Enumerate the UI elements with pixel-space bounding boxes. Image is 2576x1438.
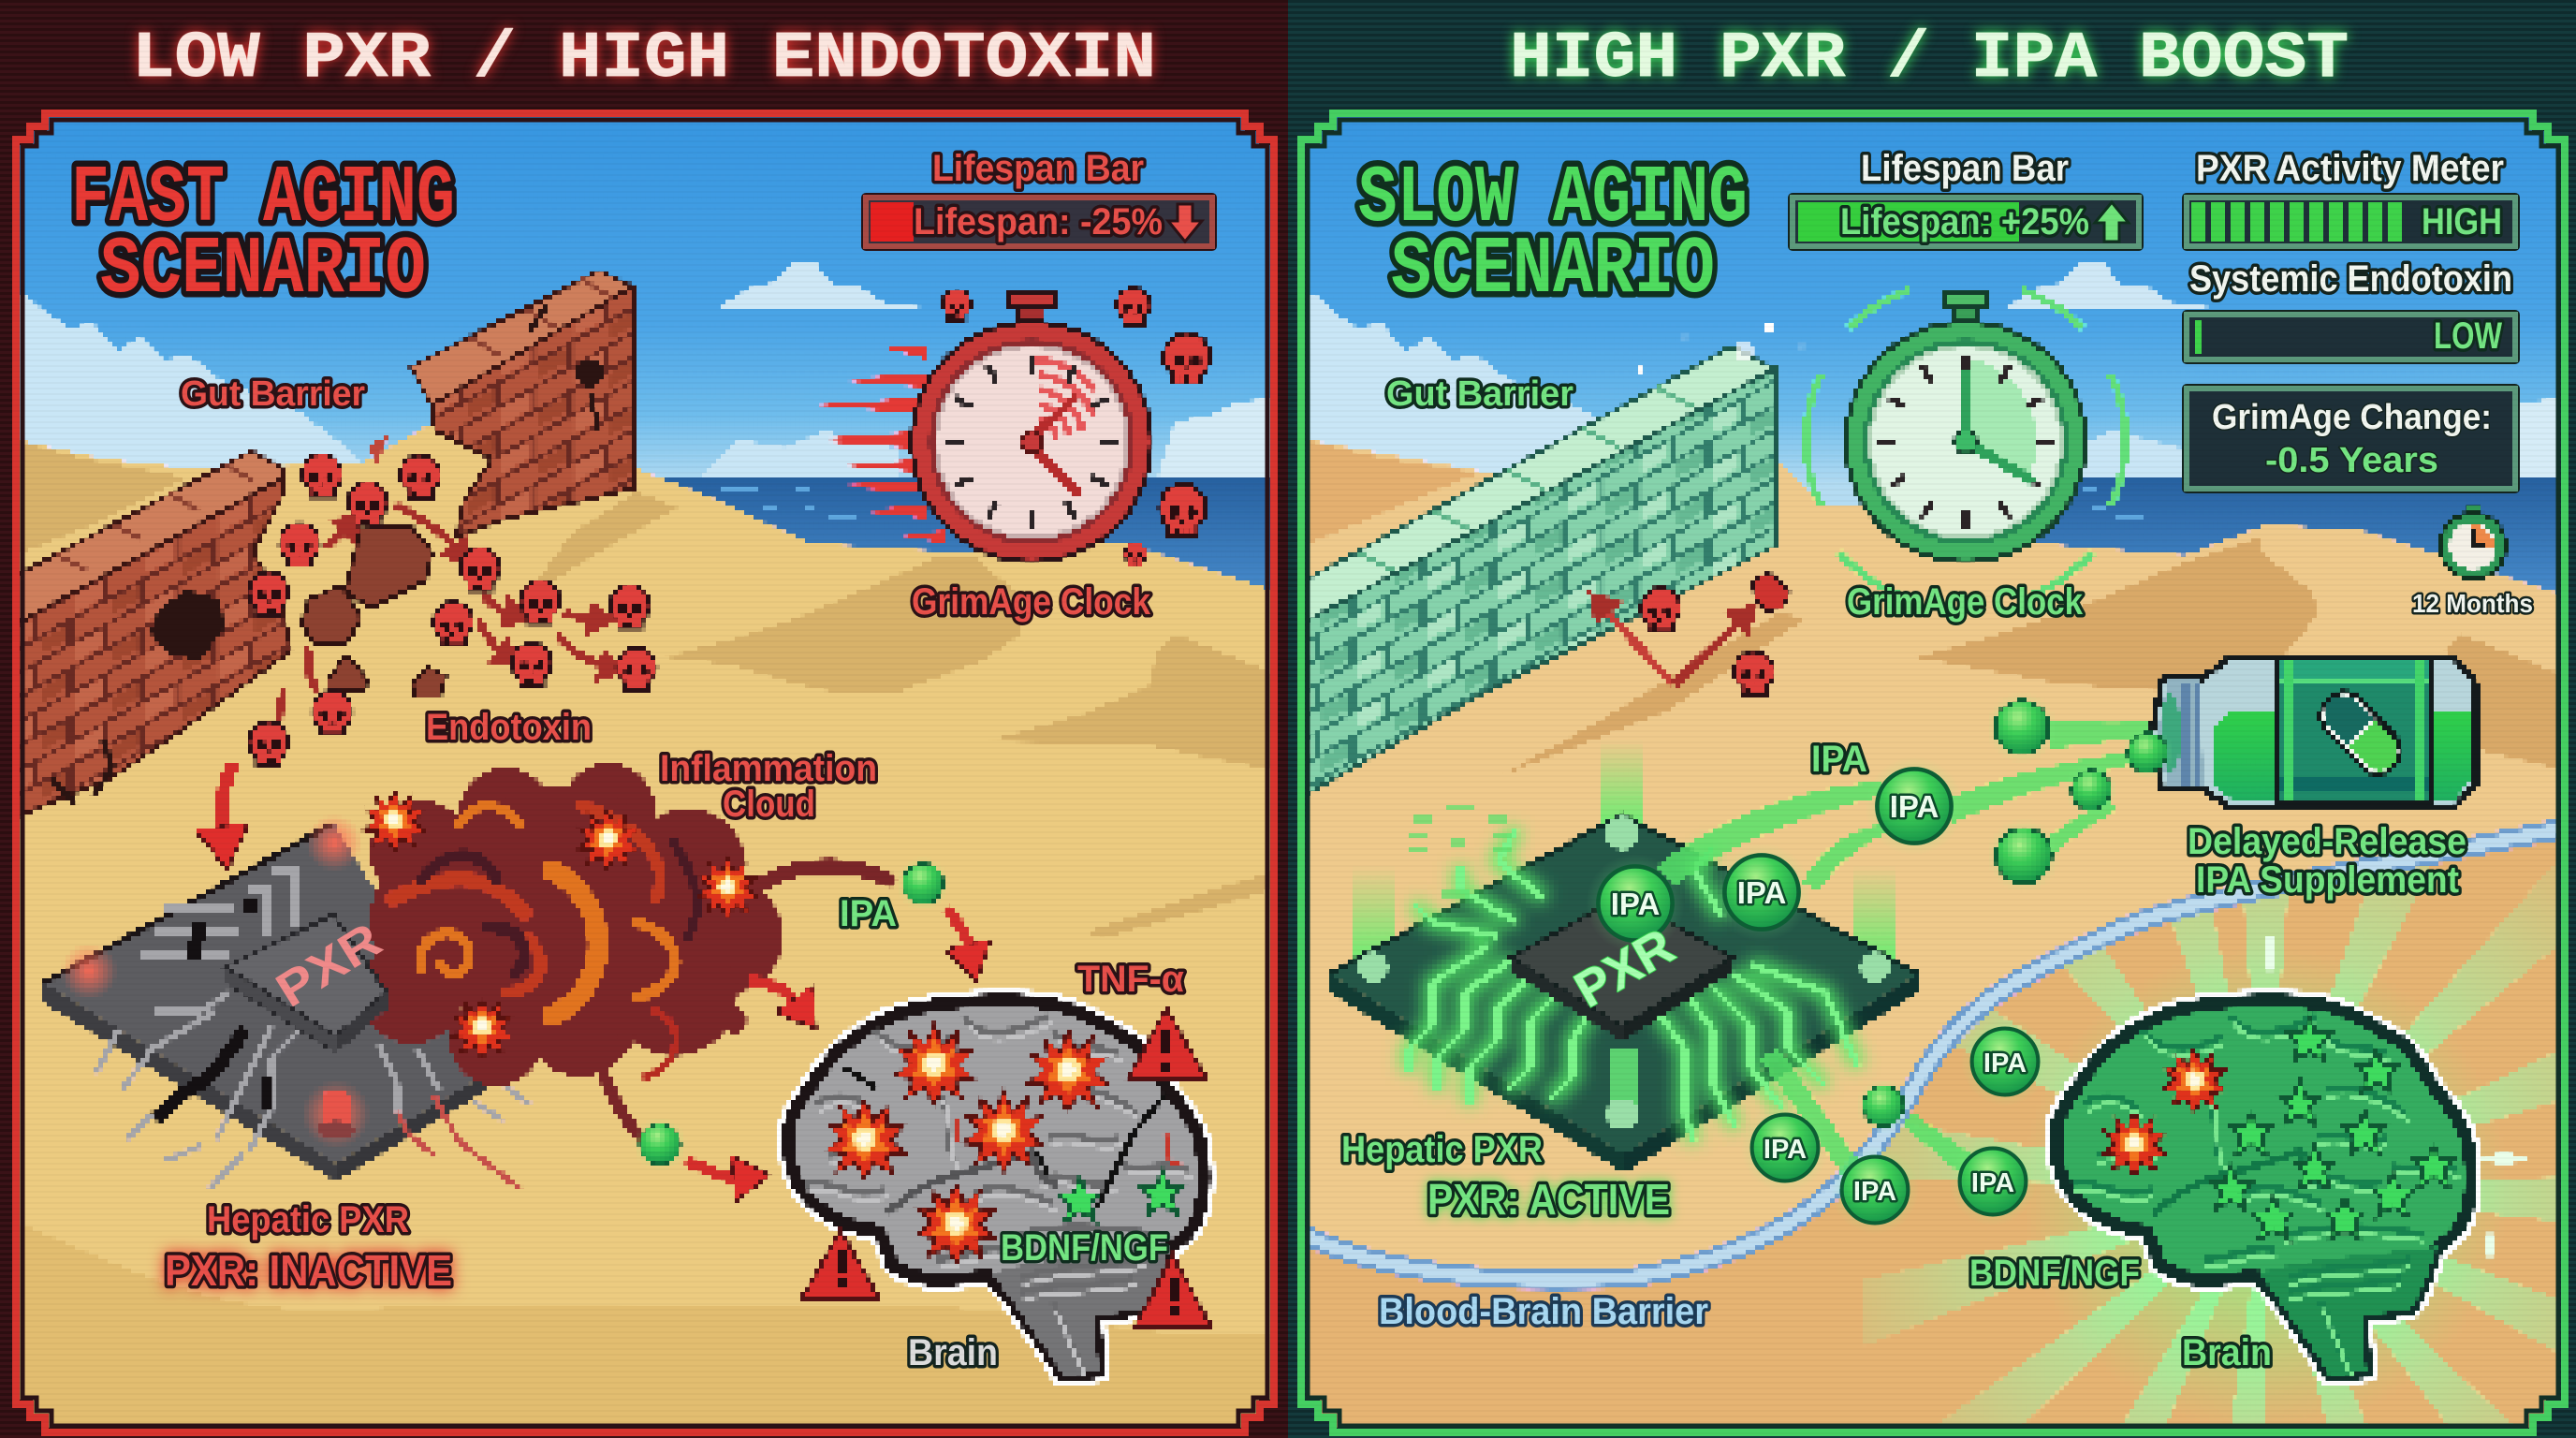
title: low PXR: LOW PXR / HIGH ENDOTOXIN — [132, 22, 1156, 96]
central PXR die — [1511, 896, 1733, 1041]
lifespan bar right: Lifespan: +25% — [1840, 201, 2089, 242]
label: gut barrier left: Gut Barrier — [181, 374, 365, 414]
IPA sphere 3: IPA — [1611, 887, 1660, 921]
label: TNF-alpha: TNF-α — [1077, 959, 1184, 1000]
GrimAge clock motion rings — [1806, 290, 2126, 599]
label: IPA right: IPA — [1811, 739, 1867, 780]
endotoxin flow arrows — [279, 506, 608, 721]
gut barrier wall intact — [1288, 346, 1775, 805]
GrimAge change box: -0.5 Years — [2265, 441, 2438, 480]
label: IPA left: IPA — [840, 893, 897, 934]
deflected skulls — [1641, 573, 1790, 695]
brain: healthy — [2056, 1001, 2471, 1376]
IPA sphere 5 — [1741, 1104, 1829, 1192]
sand dunes — [0, 426, 1288, 1438]
explosions in cloud — [364, 790, 757, 1058]
IPA stream trails — [1657, 719, 2153, 1203]
panel: slow aging scenario art — [1288, 112, 2576, 1438]
GrimAge clock — [912, 291, 1151, 562]
label: PXR on chip right: PXR — [1565, 917, 1684, 1019]
IPA sphere 4: IPA — [1983, 1049, 2027, 1078]
panel frame: right — [1301, 113, 2565, 1432]
label: gut barrier right: Gut Barrier — [1386, 374, 1573, 414]
hepatic PXR chip broken — [44, 814, 530, 1189]
inflammation cloud — [360, 763, 889, 1137]
label: brain right: Brain — [2182, 1332, 2272, 1373]
IPA balls with labels on right panel — [1586, 756, 2049, 1234]
brain sparkles — [2263, 927, 2527, 1264]
endotoxin skulls — [249, 454, 656, 765]
clock skulls — [943, 288, 1210, 566]
label: grimage clock left: GrimAge Clock — [912, 581, 1151, 623]
heading: fast aging: SCENARIO — [100, 224, 426, 315]
label: inflammation cloud: Cloud — [723, 784, 815, 825]
label: BDNF/NGF right: BDNF/NGF — [1969, 1253, 2140, 1294]
lifespan bar right — [1788, 148, 2144, 251]
glow under traces — [1409, 829, 1858, 1142]
heading: slow aging: SLOW AGING — [1358, 153, 1748, 244]
IPA sphere 6 — [1831, 1146, 1919, 1234]
heading: fast aging — [71, 153, 455, 315]
wall: right broken piece — [411, 271, 633, 536]
lifespan bar left: Lifespan: -25% — [914, 201, 1163, 242]
label: BDNF/NGF left: BDNF/NGF — [1001, 1227, 1168, 1269]
IPA sphere 1 — [1865, 756, 1964, 856]
systemic endotoxin meter: LOW — [2434, 315, 2502, 357]
sky, clouds and sea — [1288, 112, 2576, 626]
brain: damaged — [789, 1001, 1204, 1376]
heading: slow aging — [1358, 153, 1748, 315]
label: hepatic PXR left: Hepatic PXR — [207, 1199, 409, 1240]
IPA sphere 5: IPA — [1764, 1135, 1807, 1165]
blood-brain barrier curve — [1288, 826, 2576, 1280]
small IPA pellets — [1856, 692, 2174, 1133]
deflected endotoxin arrows — [1603, 607, 1743, 685]
IPA sphere 6: IPA — [1853, 1177, 1896, 1207]
IPA sphere 1: IPA — [1890, 789, 1939, 824]
PXR activity meter — [2182, 148, 2520, 251]
IPA sphere 3 — [1586, 854, 1685, 953]
label: blood-brain barrier: Blood-Brain Barrier — [1379, 1291, 1708, 1332]
GrimAge change box: GrimAge Change: — [2212, 398, 2492, 437]
PXR activity meter: PXR Activity Meter — [2196, 148, 2504, 189]
header band: left — [0, 0, 1288, 1438]
IPA sphere 2: IPA — [1737, 875, 1786, 910]
label: grimage clock right: GrimAge Clock — [1847, 581, 2084, 623]
label: brain left: Brain — [908, 1332, 998, 1373]
GrimAge change box — [2182, 384, 2520, 493]
title: high PXR: HIGH PXR / IPA BOOST — [1510, 22, 2349, 96]
lifespan bar left — [861, 148, 1217, 251]
wall: left broken piece — [0, 451, 291, 824]
corner light beams — [1353, 740, 1895, 969]
label: PXR inactive: PXR: INACTIVE — [165, 1246, 452, 1295]
IPA sphere 4 — [1961, 1018, 2049, 1106]
rubble — [301, 435, 446, 697]
label: delayed-release IPA supplement — [2188, 821, 2466, 901]
label: inflammation cloud: Inflammation — [660, 748, 877, 789]
bottle: delayed-release IPA supplement — [2151, 657, 2476, 808]
IPA sphere 7: IPA — [1971, 1168, 2014, 1198]
arrow: endotoxin to hepatic PXR — [221, 763, 234, 833]
header band: right — [1288, 0, 2576, 1438]
heading: fast aging: FAST AGING — [71, 153, 455, 244]
GrimAge clock — [1846, 291, 2086, 562]
arrows to brain — [686, 908, 970, 1178]
warning triangles — [801, 1008, 1210, 1326]
central PXR die — [226, 915, 387, 1053]
panel frame: left — [16, 113, 1274, 1432]
sparkle — [1637, 323, 1805, 373]
label: endotoxin: Endotoxin — [426, 707, 592, 748]
brain glow field — [1288, 805, 2576, 1438]
receptor halo — [1411, 805, 1512, 899]
label: 12 months: 12 Months — [2412, 589, 2533, 618]
red beacons — [61, 814, 370, 1148]
label: delayed-release IPA supplement: IPA Supplement — [2196, 859, 2459, 901]
IPA sphere 7 — [1949, 1137, 2037, 1225]
sky, clouds and sea — [20, 117, 1270, 590]
label: delayed-release IPA supplement: Delayed-Release — [2188, 821, 2466, 862]
hepatic PXR chip active — [1329, 740, 1919, 1173]
sand dunes — [1288, 436, 2576, 1438]
label: PXR on chip left: PXR — [267, 913, 391, 1019]
small 12 month clock — [2440, 505, 2506, 579]
IPA dots — [633, 857, 950, 1171]
lifespan bar left: Lifespan Bar — [932, 148, 1144, 189]
label: hepatic PXR right: Hepatic PXR — [1341, 1129, 1543, 1170]
systemic endotoxin meter — [2182, 258, 2520, 364]
systemic endotoxin meter: Systemic Endotoxin — [2189, 258, 2512, 300]
lifespan bar right: Lifespan Bar — [1861, 148, 2069, 189]
IPA sphere 2 — [1712, 843, 1811, 942]
heading: slow aging: SCENARIO — [1391, 224, 1715, 315]
label: PXR active: PXR: ACTIVE — [1427, 1175, 1670, 1224]
GrimAge clock streaks — [805, 345, 945, 543]
PXR activity meter: HIGH — [2422, 201, 2502, 242]
panel: fast aging scenario art — [0, 112, 1288, 1438]
label: inflammation cloud — [660, 748, 877, 825]
green beacons — [1358, 816, 1890, 1130]
